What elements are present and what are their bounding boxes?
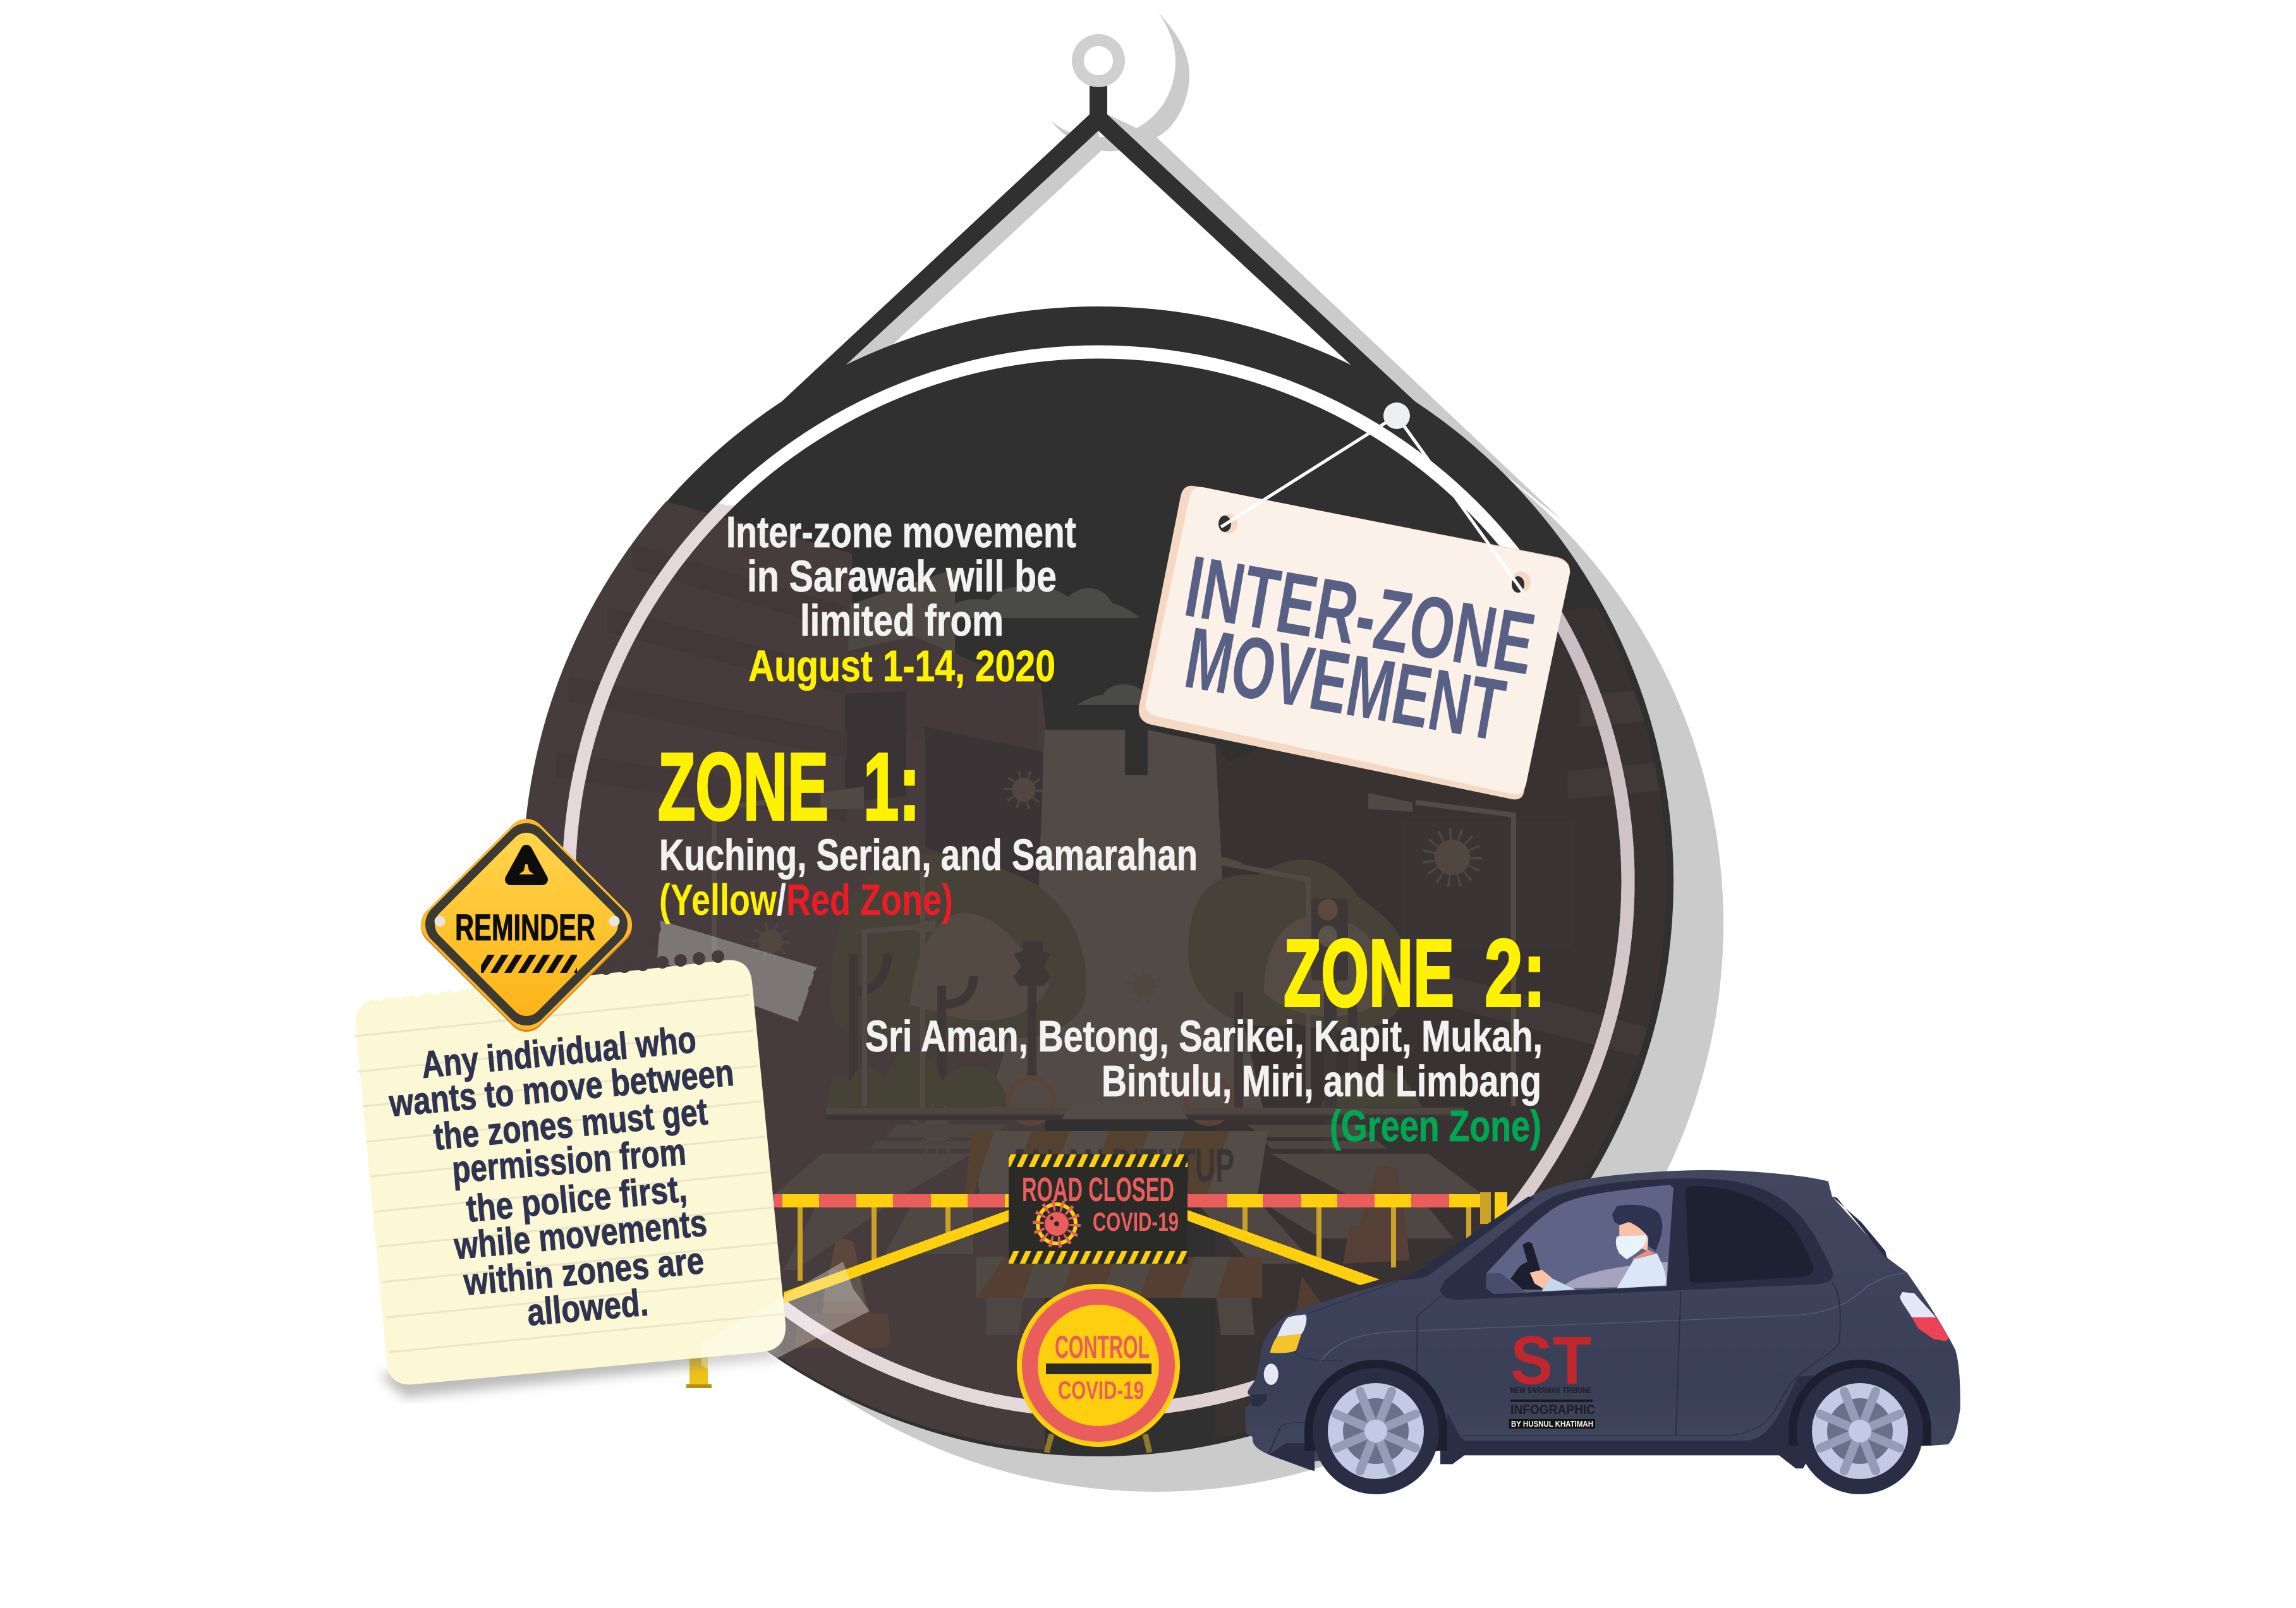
zone 2 heading: 2: bbox=[1485, 919, 1546, 1026]
tree trunks bbox=[853, 954, 1352, 1112]
sill bbox=[1440, 1375, 1813, 1468]
screws bbox=[435, 916, 445, 926]
right buildings bbox=[1215, 608, 1667, 1439]
tape: bottom of note bbox=[702, 1262, 870, 1384]
note shadow bbox=[379, 1339, 777, 1398]
note text: the police first, bbox=[465, 1167, 689, 1230]
road closed sign: ROAD CLOSED bbox=[1022, 1171, 1174, 1209]
note ruled lines bbox=[355, 995, 786, 1352]
panel: faded city scene bbox=[526, 502, 1667, 1449]
left buildings bbox=[526, 502, 1046, 1449]
car bbox=[1245, 1170, 1960, 1494]
note text: permission from bbox=[451, 1130, 688, 1191]
control sign bbox=[1017, 1284, 1180, 1453]
street lamps bbox=[714, 802, 1514, 1112]
clouds bbox=[942, 586, 1139, 618]
sign title: MOVEMENT bbox=[1179, 609, 1512, 759]
sign title: INTER-ZONE bbox=[1179, 538, 1541, 693]
building facades bbox=[632, 543, 847, 758]
control sign: CONTROL bbox=[1055, 1329, 1150, 1365]
yellow barrier rail left bbox=[774, 1194, 1009, 1303]
dark building block bbox=[845, 691, 906, 802]
front bumper bbox=[1268, 1443, 1315, 1471]
viruses in scene bbox=[758, 778, 1470, 1145]
zone 2 heading: ZONE bbox=[1284, 919, 1454, 1026]
note text: the zones must get bbox=[432, 1090, 709, 1158]
zone 1 heading: ZONE bbox=[658, 733, 829, 840]
driver bbox=[1486, 1205, 1668, 1294]
intro text: August 1-14, 2020 bbox=[748, 641, 1055, 691]
reminder diamond sign bbox=[435, 838, 619, 1013]
intro text: in Sarawak will be bbox=[747, 552, 1057, 601]
hanger shadow bbox=[587, 13, 1723, 1492]
sign holes bbox=[1220, 514, 1237, 534]
sign nail bbox=[1383, 402, 1410, 429]
tail light bbox=[1900, 1292, 1936, 1317]
rear wheel bbox=[1789, 1360, 1931, 1494]
white ring bbox=[569, 352, 1628, 1411]
road closed sign: COVID-19 bbox=[1093, 1207, 1179, 1236]
central tower bbox=[986, 730, 1264, 1112]
icon: virus bbox=[1036, 1202, 1078, 1245]
round board bbox=[523, 306, 1673, 1456]
front wheel bbox=[1304, 1360, 1447, 1494]
window frame bbox=[1440, 1178, 1833, 1300]
intro text: Inter-zone movement bbox=[726, 507, 1076, 557]
tape: top of note bbox=[650, 921, 820, 1022]
scene edge sliver bbox=[526, 501, 667, 819]
hanger ring bbox=[1078, 40, 1119, 81]
panel: reminder note bbox=[355, 950, 786, 1384]
zone 1 details: (Yellow/Red Zone) bbox=[659, 875, 953, 924]
car door logo bbox=[1509, 1322, 1595, 1429]
car lines bbox=[1320, 1272, 1907, 1362]
barricade bbox=[965, 1131, 1268, 1335]
car door logo: BY HUSNUL KHATIMAH bbox=[1511, 1419, 1593, 1429]
note text: within zones are bbox=[461, 1239, 706, 1303]
road ledges bbox=[826, 1108, 1464, 1115]
car door logo: ST bbox=[1510, 1322, 1591, 1398]
car door logo: NEW SARAWAK TRIBUNE bbox=[1510, 1385, 1591, 1395]
note text: Any individual who bbox=[420, 1018, 698, 1086]
road closed sign bbox=[1009, 1154, 1187, 1264]
note text: allowed. bbox=[525, 1281, 650, 1334]
headlight bbox=[1277, 1315, 1306, 1337]
intro text: limited from bbox=[800, 596, 1004, 645]
intro text bbox=[726, 507, 1076, 691]
brown mid building bbox=[848, 569, 955, 653]
yellow barrier rail right bbox=[1187, 1192, 1507, 1285]
traffic lights bbox=[1014, 898, 1348, 1107]
sign ropes bbox=[1221, 416, 1523, 592]
zone 2 details: (Green Zone) bbox=[1330, 1101, 1541, 1151]
car door logo: INFOGRAPHIC bbox=[1510, 1403, 1595, 1417]
note text: while movements bbox=[452, 1202, 708, 1267]
rear window bbox=[1686, 1186, 1813, 1283]
hazard stripes bbox=[481, 955, 577, 973]
cones bbox=[822, 1238, 869, 1314]
zone 1 details: Kuching, Serian, and Samarahan bbox=[659, 830, 1198, 880]
barricade: JALAN DITUTUP bbox=[1010, 1139, 1234, 1192]
sign title bbox=[1179, 538, 1541, 759]
note perforations bbox=[373, 980, 462, 1001]
crosswalk stripes bbox=[869, 1125, 1387, 1149]
reminder diamond sign: REMINDER bbox=[455, 907, 595, 948]
icon: warning triangle bbox=[511, 850, 542, 880]
hedges bbox=[849, 1070, 1006, 1107]
note text: wants to move between bbox=[387, 1051, 736, 1125]
control sign: COVID-19 bbox=[1058, 1377, 1144, 1405]
car body bbox=[1245, 1170, 1960, 1461]
front window bbox=[1486, 1185, 1673, 1294]
zone 1 details bbox=[659, 830, 1198, 924]
zone 2 details: Bintulu, Miri, and Limbang bbox=[1102, 1056, 1541, 1106]
yellow post bbox=[686, 1352, 712, 1388]
zone 2 details bbox=[865, 1012, 1543, 1151]
note text bbox=[387, 1018, 736, 1334]
tyres bbox=[1005, 1075, 1056, 1126]
trees bbox=[944, 854, 1086, 1039]
zone 2 details: Sri Aman, Betong, Sarikei, Kapit, Mukah, bbox=[865, 1012, 1543, 1061]
hanger cord bbox=[724, 85, 1473, 455]
fog lamp bbox=[1264, 1363, 1279, 1385]
hanging sign bbox=[1139, 402, 1570, 799]
zone 1 heading: 1: bbox=[863, 733, 920, 840]
